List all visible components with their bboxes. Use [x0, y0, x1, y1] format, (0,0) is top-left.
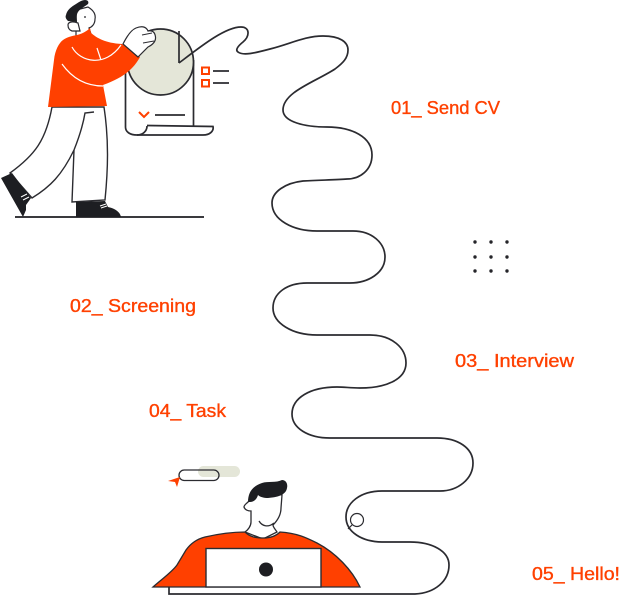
icon: cursor and search pill: [168, 466, 240, 487]
decorative dot grid: [473, 240, 509, 273]
step label: 03 Interview: 03_ Interview: [455, 351, 575, 372]
illustration: man at laptop: [153, 480, 360, 587]
step label: 05 Hello: 05_ Hello!: [532, 564, 620, 585]
winding path line: [169, 27, 473, 594]
step label: 02 Screening: 02_ Screening: [70, 296, 196, 317]
icon: location ring on path: [348, 514, 364, 529]
step label: 01 Send CV: 01_ Send CV: [391, 98, 500, 119]
step label: 04 Task: 04_ Task: [149, 401, 227, 422]
illustration: standing man with sweater: [1, 0, 204, 217]
illustration: document with pie chart: [126, 29, 229, 135]
